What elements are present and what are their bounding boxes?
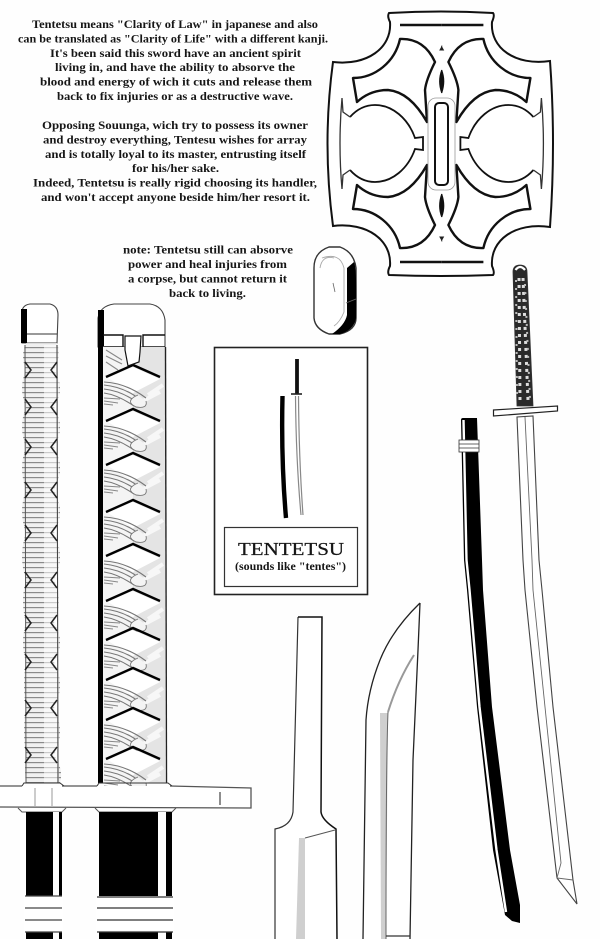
title box	[224, 528, 358, 586]
icon: collar piece (habaki)	[314, 247, 356, 334]
miniature sword	[291, 359, 303, 515]
text block: meaning of Tentetsu: back to fix injuries or as a destructive wave.	[57, 91, 293, 103]
text block: loyalty of the sword	[33, 120, 317, 204]
diamond cord wrap	[98, 336, 166, 789]
scabbard: narrow view	[24, 812, 63, 939]
title box: TENTETSU	[238, 539, 344, 559]
text block: loyalty of the sword: for his/her sake.	[132, 163, 219, 175]
text block: meaning of Tentetsu: It's been said this sword have an ancient spirit	[50, 48, 301, 60]
text block: loyalty of the sword: Opposing Souunga, wich try to possess its owner	[42, 120, 308, 132]
sword handle	[513, 265, 533, 406]
text block: meaning of Tentetsu: Tentetsu means "Clarity of Law" in japanese and also	[32, 19, 318, 31]
text block: loyalty of the sword: Indeed, Tentetsu is really rigid choosing its handler,	[33, 178, 317, 190]
pommel cap and band	[98, 304, 165, 347]
text block: meaning of Tentetsu	[18, 19, 328, 103]
text block: loyalty of the sword: and won't accept anyone beside him/her resort it.	[41, 192, 310, 204]
full sword, right side	[494, 265, 577, 904]
blade detail: tip	[363, 603, 420, 939]
sword blade	[517, 416, 577, 904]
text block: meaning of Tentetsu: can be translated as "Clarity of Life" with a different kanji.	[18, 33, 328, 45]
pommel cap	[21, 304, 58, 343]
scabbard cord bands	[24, 896, 63, 932]
text block: loyalty of the sword: and destroy everything, Tentesu wishes for array	[43, 134, 307, 146]
panel: title card	[214, 348, 368, 594]
sword hilt: wide front view	[98, 304, 166, 789]
text block: note	[123, 244, 293, 300]
text block: meaning of Tentetsu: blood and energy of wich it cuts and release them	[40, 77, 312, 89]
text block: note: back to living.	[169, 288, 246, 300]
scabbard bands	[459, 440, 479, 452]
scabbard: wide view	[96, 812, 174, 939]
text block: note: note: Tentetsu still can absorve	[123, 244, 293, 256]
black scabbard, right side	[459, 418, 520, 923]
text block: note: power and heal injuries from	[128, 259, 287, 271]
crossguard shared by both hilts	[0, 783, 251, 812]
text block: note: a corpse, but cannot return it	[128, 274, 287, 286]
icon: sword guard (tsuba)	[328, 12, 553, 276]
text block: meaning of Tentetsu: living in, and have the ability to absorve the	[55, 62, 295, 74]
title box: (sounds like "tentes")	[235, 561, 346, 573]
ribbed cord wrap	[22, 343, 61, 783]
text block: loyalty of the sword: and is totally loyal to its master, entrusting itself	[45, 149, 306, 161]
wide scabbard cord bands	[96, 896, 174, 932]
blade detail: tang	[275, 617, 337, 939]
sword crossguard	[494, 406, 558, 416]
sword hilt: narrow side view	[21, 304, 61, 783]
miniature scabbard	[282, 396, 286, 518]
